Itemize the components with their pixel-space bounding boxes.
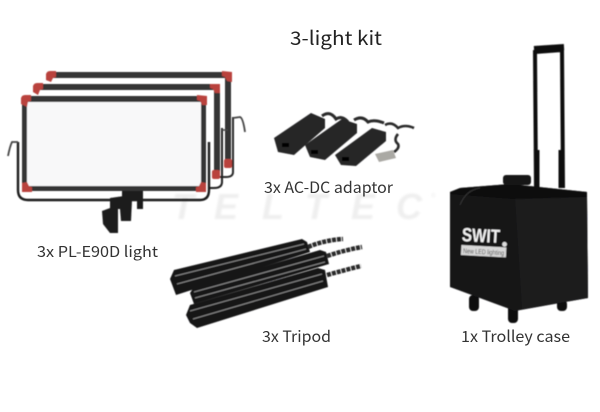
watermark: TELTEC <box>172 186 423 227</box>
tripods <box>170 239 362 328</box>
front light panel <box>8 95 209 200</box>
wheels <box>469 295 567 323</box>
label: lights: 3x PL-E90D light <box>37 241 158 262</box>
lights: three LED panels <box>8 71 245 233</box>
title: 3-light kit <box>290 24 382 51</box>
watermark: ® <box>431 189 436 204</box>
tripod 1 <box>170 239 343 295</box>
telescopic handle <box>534 47 564 188</box>
tripod 2 <box>190 247 362 304</box>
light stand mount <box>102 191 143 233</box>
adaptor 2 <box>305 118 384 160</box>
tripod 3 <box>186 266 361 328</box>
middle light panel <box>33 83 228 188</box>
trolley case <box>450 47 588 323</box>
case logo: New LED lighting <box>463 248 504 257</box>
adaptor 1 <box>274 113 348 155</box>
case body <box>450 184 588 311</box>
label: tripods: 3x Tripod <box>262 325 331 347</box>
case logo <box>461 225 508 257</box>
back light panel <box>46 71 245 177</box>
label: trolley case: 1x Trolley case <box>461 325 570 347</box>
case logo: SWIT <box>461 225 501 248</box>
AC-DC adaptors <box>274 113 414 166</box>
adaptor 3 with cable and connector <box>335 124 414 166</box>
label: adaptors: 3x AC-DC adaptor <box>264 176 394 198</box>
